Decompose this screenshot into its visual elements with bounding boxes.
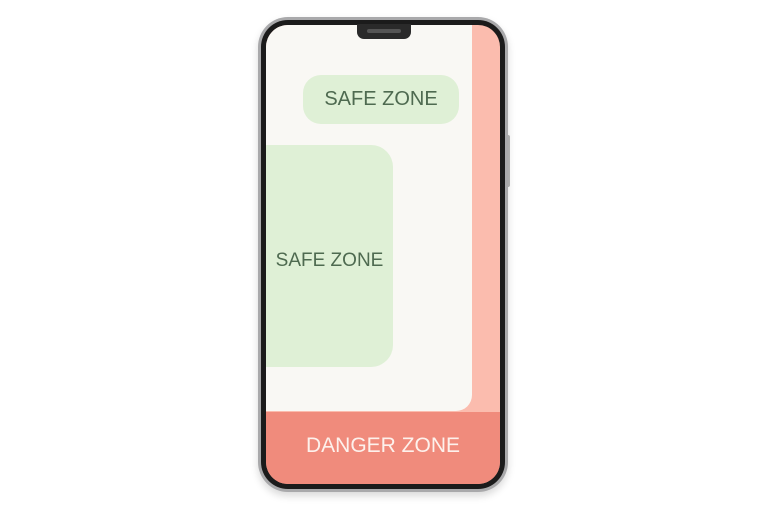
screen	[266, 25, 500, 484]
panel: danger zone: DANGER ZONE	[306, 434, 460, 457]
panel: safe zone top: SAFE ZONE	[324, 88, 438, 110]
bezel	[261, 20, 505, 489]
panel: danger zone	[266, 412, 500, 484]
panel: safe zone left: SAFE ZONE	[276, 250, 383, 271]
panel: safe zone left	[266, 145, 393, 367]
icon: side button	[506, 135, 510, 187]
icon: notch	[357, 24, 411, 39]
panel: safe zone top	[303, 75, 459, 124]
cream area	[266, 25, 472, 411]
phone	[258, 17, 508, 492]
